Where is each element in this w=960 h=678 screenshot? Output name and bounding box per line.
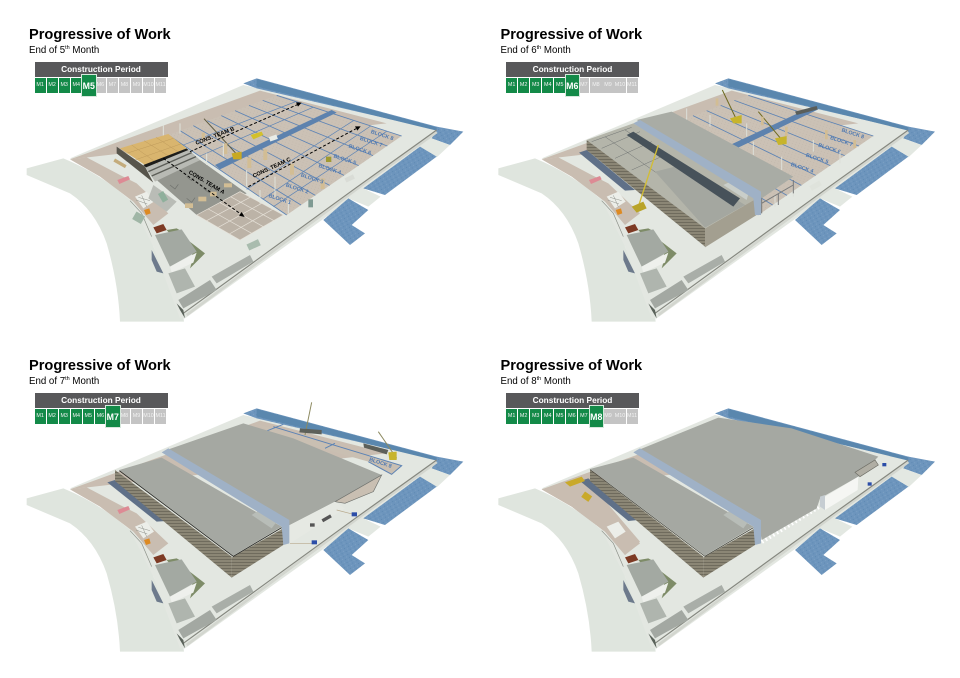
remaining block strip	[253, 423, 402, 475]
pink entry marking	[117, 506, 130, 514]
block grid field	[168, 95, 402, 215]
gate apron	[607, 522, 626, 538]
subtitle: End of 8th Month	[500, 376, 571, 387]
construction period timeline: M8	[590, 412, 602, 422]
second hall roof	[638, 418, 878, 540]
steel frame columns	[687, 108, 840, 207]
concrete slab	[157, 160, 247, 215]
construction period timeline: M5	[556, 413, 564, 419]
arrow: team C: CONS. TEAM C	[252, 157, 292, 180]
arrow: team B: CONS. TEAM B	[195, 126, 236, 147]
title: Progressive of Work	[500, 27, 642, 43]
header: month 7	[29, 358, 171, 428]
arrow: team A	[163, 158, 245, 217]
construction period timeline: M5	[85, 413, 92, 419]
construction period timeline: Construction Period	[533, 395, 612, 405]
cranes	[299, 402, 397, 460]
blue vehicles	[352, 512, 357, 516]
construction period timeline: M4	[544, 82, 551, 88]
construction period timeline: M6	[97, 82, 104, 88]
construction period timeline: M10	[143, 413, 154, 419]
construction period timeline: M1	[508, 413, 515, 419]
site base	[27, 408, 463, 652]
white end wall	[825, 477, 858, 510]
block labels: BLOCK 1	[268, 193, 292, 206]
central access band	[215, 110, 337, 169]
block labels: BLOCK 4	[318, 163, 342, 176]
title: Progressive of Work	[29, 27, 171, 43]
construction period timeline: M9	[133, 413, 140, 419]
hall crane	[632, 145, 658, 213]
subtitle: End of 5th Month	[29, 45, 99, 56]
construction period timeline: Construction Period	[61, 64, 141, 74]
construction period timeline: M11	[627, 82, 637, 88]
panel: month 7 site view	[27, 402, 463, 652]
pink entry marking	[117, 176, 130, 184]
construction period timeline: M7	[109, 82, 116, 88]
panel: month 8 site view	[498, 408, 935, 652]
beige yard	[542, 473, 640, 555]
header: month 5	[29, 27, 171, 97]
construction period timeline: M2	[520, 413, 527, 419]
construction period timeline: M3	[60, 413, 68, 419]
dividing wall	[633, 120, 761, 215]
construction period timeline: M7	[580, 82, 588, 88]
dividing wall	[633, 448, 761, 545]
construction period timeline: M4	[72, 82, 80, 88]
block labels: BLOCK 2	[285, 183, 309, 196]
construction period timeline: Construction Period	[533, 64, 612, 74]
open frame under roof end	[762, 180, 793, 213]
construction period timeline	[506, 62, 639, 97]
subtitle: End of 6th Month	[500, 45, 571, 56]
vehicles	[809, 181, 822, 191]
parking strip	[762, 505, 822, 542]
construction period timeline: M6	[566, 81, 578, 91]
arrow: team B	[190, 102, 302, 152]
block labels: BLOCK 8	[370, 129, 394, 142]
panel: month 6 site view	[498, 78, 935, 322]
construction period timeline: M1	[36, 413, 44, 419]
construction period timeline: M6	[97, 413, 104, 419]
construction period timeline: Construction Period	[61, 395, 141, 405]
cross lines	[183, 102, 387, 207]
construction period timeline: M5	[556, 82, 564, 88]
wall of steel columns	[163, 123, 288, 213]
construction period timeline: M8	[121, 413, 128, 419]
pink entry marking	[589, 176, 602, 184]
construction period timeline: M3	[532, 413, 539, 419]
construction period timeline: M8	[121, 82, 128, 88]
first hall	[107, 458, 283, 578]
block labels: BLOCK 8	[841, 128, 865, 141]
construction period timeline: M11	[156, 413, 166, 419]
first hall with partial roof	[579, 123, 757, 247]
construction period timeline: M9	[604, 82, 612, 88]
construction period timeline: M10	[143, 82, 154, 88]
construction period timeline: M3	[60, 82, 68, 88]
construction period timeline: M2	[520, 82, 527, 88]
arrow: team C	[248, 126, 361, 187]
second hall roof under construction	[637, 112, 793, 198]
block grid field	[640, 95, 873, 215]
lattice structure	[855, 460, 878, 477]
construction period timeline: M1	[36, 82, 44, 88]
block labels: BLOCK 6	[348, 144, 372, 157]
dividing wall	[162, 448, 289, 545]
central access band	[730, 106, 818, 148]
block labels: BLOCK 6	[817, 143, 841, 156]
block labels: BLOCK 5	[333, 154, 357, 167]
construction period timeline: M4	[72, 413, 80, 419]
construction period timeline: M9	[133, 82, 140, 88]
construction period timeline: M7	[580, 413, 588, 419]
construction period timeline: M5	[83, 81, 95, 91]
title: Progressive of Work	[500, 358, 642, 374]
material stacks	[185, 133, 325, 208]
truck apron	[148, 185, 177, 212]
panel: month 5 site view	[27, 78, 463, 322]
block labels: BLOCK 7	[359, 136, 383, 149]
subtitle: End of 7th Month	[29, 376, 99, 387]
cranes	[716, 90, 856, 148]
block labels: BLOCK 3	[300, 173, 324, 186]
block labels	[268, 129, 394, 206]
construction period timeline	[35, 393, 168, 428]
construction period timeline: M1	[508, 82, 515, 88]
title: Progressive of Work	[29, 358, 171, 374]
block labels: BLOCK 4	[790, 162, 814, 175]
construction period timeline: M4	[544, 413, 551, 419]
construction period timeline	[35, 62, 168, 97]
blue vehicles	[882, 463, 886, 466]
block labels	[790, 128, 865, 175]
construction period timeline: M3	[532, 82, 539, 88]
first hall deck	[117, 134, 200, 183]
block 8 label: BLOCK 8	[368, 457, 392, 470]
construction period timeline: M11	[156, 82, 166, 88]
construction period timeline: M11	[627, 413, 637, 419]
construction period timeline: M7	[107, 412, 119, 422]
site base	[498, 408, 935, 652]
site base	[27, 78, 463, 322]
open frame at end	[335, 475, 382, 503]
construction period timeline: M8	[592, 82, 600, 88]
construction period timeline	[506, 393, 639, 428]
paving grid	[197, 192, 283, 240]
header: month 6	[500, 27, 642, 97]
construction period timeline: M2	[48, 82, 56, 88]
yellow vehicles	[565, 477, 592, 502]
construction period timeline: M6	[568, 413, 576, 419]
block labels: BLOCK 5	[805, 153, 829, 166]
second hall roof	[167, 423, 382, 527]
crane and plant	[113, 119, 355, 251]
header: month 8	[500, 358, 642, 428]
block labels: BLOCK 7	[829, 135, 853, 148]
construction period timeline: M10	[615, 413, 625, 419]
second hall front offices	[287, 502, 353, 543]
first hall	[580, 458, 755, 578]
arrow: team A: CONS. TEAM A	[187, 170, 225, 196]
construction period timeline: M9	[604, 413, 612, 419]
construction period timeline: M2	[48, 413, 56, 419]
construction period timeline: M10	[615, 82, 625, 88]
site base	[498, 78, 935, 322]
